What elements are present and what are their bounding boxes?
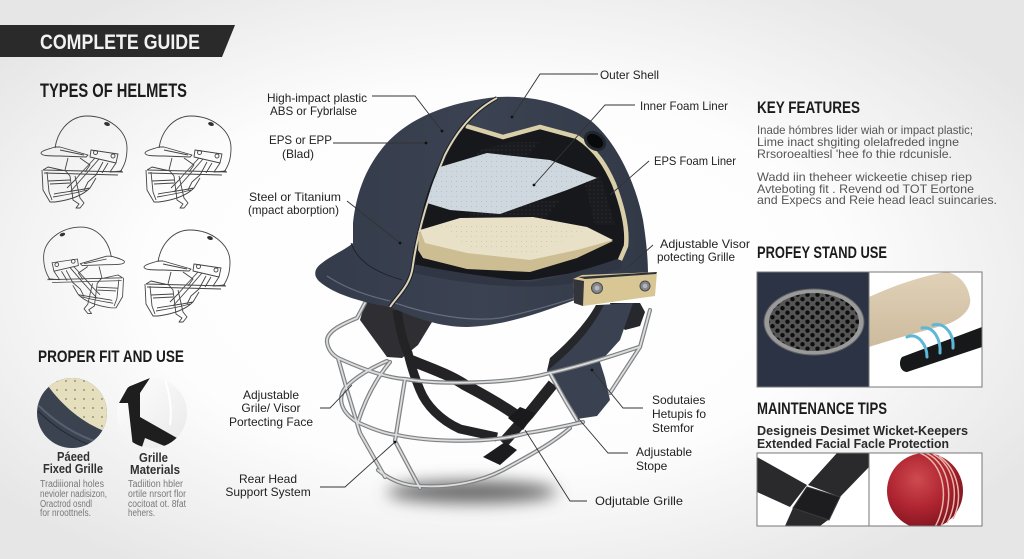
label: adjustable grille visor: [229, 385, 352, 429]
callouts: left labels: [225, 91, 443, 499]
label: adjustable visor: Adjustable Visor: [660, 237, 750, 251]
image: helmet vent mesh: [757, 272, 869, 387]
label: outer shell: Outer Shell: [600, 68, 659, 82]
title banner: [0, 25, 235, 57]
panel: proper fit and use: [37, 347, 187, 519]
outer shell: [315, 97, 648, 327]
opening: [412, 125, 625, 280]
side flap right: [547, 303, 645, 419]
label: odjutable grille: [525, 430, 683, 508]
title banner: COMPLETE GUIDE: [40, 31, 200, 54]
ear pad left: [360, 302, 434, 358]
foam sheet white: [427, 153, 597, 214]
label: adjustable stope: Stope: [636, 459, 668, 473]
text: fixed grille caption: [40, 449, 107, 519]
label: steel or titanium: [248, 190, 401, 244]
foam pad cream: [418, 217, 613, 272]
label: rear head support: Support System: [225, 485, 311, 499]
label: rear head support: [225, 441, 396, 499]
heading: maintenance tips: MAINTENANCE TIPS: [757, 399, 887, 418]
label: rear head support: Rear Head: [239, 472, 297, 486]
label: inner foam liner: Inner Foam Liner: [640, 99, 728, 113]
text: key features body: [757, 123, 997, 207]
panel frame: [757, 453, 982, 526]
heading: key features: KEY FEATURES: [757, 98, 860, 117]
panel: types of helmets: [40, 81, 231, 322]
text: key features body: Inade hómbres lider wiah or impact plastic;: [757, 123, 973, 137]
label: eps foam liner: [610, 154, 736, 195]
label: adjustable grille visor: Adjustable: [243, 388, 299, 402]
steel grille: [327, 303, 650, 488]
icon: helmet line drawing 2: [145, 116, 231, 208]
label: adjustable grille visor: Portecting Face: [229, 415, 313, 429]
text: fixed grille caption: Páeed: [57, 449, 90, 464]
label: high-impact plastic: High-impact plastic: [267, 91, 367, 105]
text: fixed grille caption: Fixed Grille: [43, 461, 103, 476]
icon: grille materials circle: [117, 378, 187, 448]
text: grille materials caption: [128, 450, 187, 519]
heading: types of helmets: TYPES OF HELMETS: [40, 81, 187, 102]
label: steel or titanium: Steel or Titanium: [249, 190, 341, 204]
label: high-impact plastic: ABS or Fybrlalse: [270, 104, 357, 118]
cream liner border: [466, 126, 626, 260]
text: key features body: Rrsoroealtiesl 'hee fo thie rdcunisle.: [757, 147, 952, 161]
icon: helmet line drawing 4: [144, 230, 230, 322]
label: sodutaies: [591, 369, 706, 435]
text: grille materials caption: Materials: [130, 462, 180, 477]
panel: key features: [757, 98, 997, 207]
label: eps or epp: (Blad): [282, 147, 314, 161]
text: grille materials caption: cocitoat ot. 8fat: [128, 499, 186, 510]
label: sodutaies: Sodutaies: [652, 393, 705, 407]
shell seam: [390, 98, 497, 307]
text: grille materials caption: hehers.: [128, 508, 155, 519]
label: odjutable grille: Odjutable Grille: [595, 494, 683, 508]
side bracket: [573, 272, 657, 306]
panel: profey stand use: [757, 243, 982, 387]
ground shadow: [387, 481, 557, 503]
panel: maintenance tips: [757, 399, 982, 529]
heading: profey stand use: PROFEY STAND USE: [757, 243, 887, 262]
label: high-impact plastic: [267, 91, 443, 132]
label: adjustable visor: potecting Grille: [657, 250, 735, 264]
label: eps or epp: [269, 133, 427, 161]
text: maintenance subheading: Designeis Desimet Wicket-Keepers: [757, 423, 968, 438]
text: maintenance subheading: Extended Facial Facle Protection: [757, 436, 949, 451]
text: fixed grille caption: nevioler nadisizon,: [40, 489, 107, 500]
label: outer shell: [511, 68, 659, 118]
text: grille materials caption: Grille: [139, 450, 168, 465]
image: chin strap buckle: [757, 453, 869, 526]
label: adjustable grille visor: Grile/ Visor: [241, 401, 301, 415]
text: maintenance subheading: [757, 423, 968, 451]
rim line: [351, 243, 575, 284]
upper strap buckle: [508, 407, 535, 430]
lower strap buckle: [483, 442, 517, 465]
label: inner foam liner: [533, 99, 728, 186]
vent hole: [580, 127, 610, 155]
chin strap: [397, 310, 553, 465]
text: grille materials caption: Tadiition hbler: [128, 479, 184, 490]
text: fixed grille caption: for nroottnels.: [40, 508, 91, 519]
visor highlight: [327, 276, 575, 319]
illustration: cricket helmet cutaway: [315, 97, 657, 503]
label: adjustable stope: Adjustable: [636, 445, 692, 459]
image: cricket ball: [869, 453, 982, 529]
label: sodutaies: Stemfor: [652, 421, 694, 435]
text: grille materials caption: ortile nrsort flor: [128, 489, 187, 500]
label: sodutaies: Hetupis fo: [652, 407, 706, 421]
inner rim navy: [410, 258, 622, 287]
label: eps foam liner: EPS Foam Liner: [654, 154, 736, 168]
text: key features body: Wadd iin theheer wickeetie chisep riep: [757, 170, 972, 184]
label: eps or epp: EPS or EPP: [269, 133, 332, 147]
icon: helmet line drawing 3: [44, 227, 124, 314]
icon: padded helmet circle: [37, 378, 107, 448]
text: key features body: Lime inact shgiting olelafreded ingne: [757, 135, 959, 149]
text: key features body: Avteboting fit . Revend od TOT Eortone: [757, 182, 974, 196]
text: fixed grille caption: Oractrod osndl: [40, 499, 92, 510]
inner ribs: [470, 142, 540, 165]
icon: helmet line drawing 1: [41, 116, 127, 208]
text: fixed grille caption: Tradiiional holes: [40, 479, 104, 490]
label: steel or titanium: (mpact aborption): [248, 203, 339, 217]
text: key features body: and Expecs and Reie head leacl suincaries.: [757, 193, 997, 207]
image: foam and strap: [869, 272, 982, 387]
panel frame: [757, 272, 982, 387]
label: adjustable visor: [628, 237, 750, 267]
heading: proper fit and use: PROPER FIT AND USE: [38, 347, 184, 366]
callouts: right labels: [511, 68, 750, 508]
label: adjustable stope: [578, 418, 692, 473]
